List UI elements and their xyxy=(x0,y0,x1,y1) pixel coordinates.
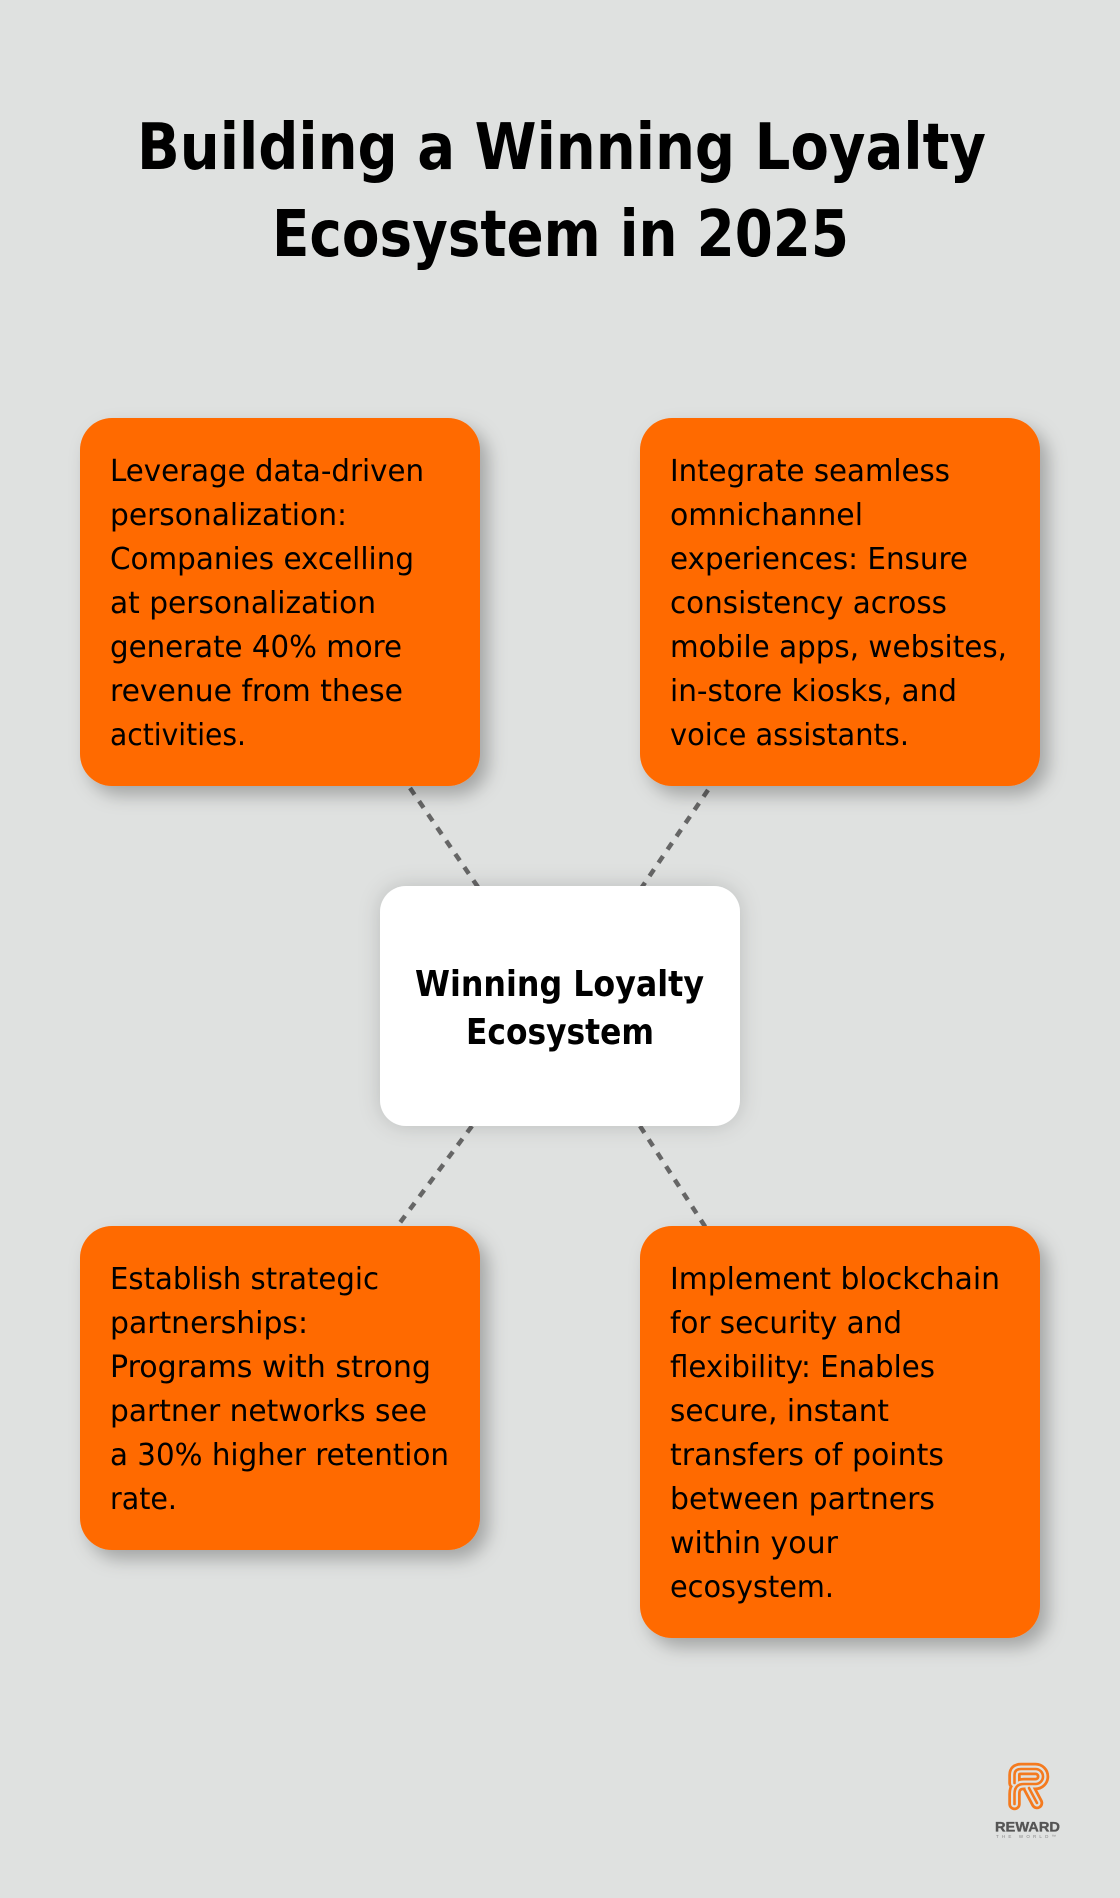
icon: R mark xyxy=(1014,1769,1043,1804)
logo: Reward the World xyxy=(995,1769,1060,1839)
panel: data-driven personalization xyxy=(80,418,480,786)
hub label xyxy=(415,964,704,1053)
connector: partnerships to hub xyxy=(396,1126,472,1228)
text: omnichannel: mobile apps, websites, xyxy=(670,630,1007,665)
panel: central hub xyxy=(380,886,740,1126)
text: partnerships: Establish strategic xyxy=(110,1262,379,1297)
title: Ecosystem in 2025 xyxy=(272,198,849,272)
text: blockchain: Implement blockchain xyxy=(670,1262,1000,1297)
text: personalization: activities. xyxy=(110,718,246,753)
text: blockchain xyxy=(670,1262,1000,1605)
text: personalization: personalization: xyxy=(110,498,347,533)
panel: blockchain xyxy=(640,1226,1040,1638)
text: blockchain: secure, instant xyxy=(670,1394,889,1429)
text: personalization: generate 40% more xyxy=(110,630,402,665)
text: omnichannel: consistency across xyxy=(670,586,947,621)
logo wordmark: REWARD xyxy=(995,1818,1060,1834)
hub label: Ecosystem xyxy=(466,1012,654,1053)
connector: omnichannel to hub xyxy=(640,790,708,890)
text: partnerships: partner networks see xyxy=(110,1394,427,1429)
text: partnerships: rate. xyxy=(110,1482,177,1517)
panel: strategic partnerships xyxy=(80,1226,480,1550)
text: blockchain: between partners xyxy=(670,1482,935,1517)
connector: personalization to hub xyxy=(410,788,480,890)
text: personalization: at personalization xyxy=(110,586,376,621)
text: omnichannel: experiences: Ensure xyxy=(670,542,968,577)
text: blockchain: flexibility: Enables xyxy=(670,1350,935,1385)
connector: blockchain to hub xyxy=(640,1126,706,1228)
text: personalization: Companies excelling xyxy=(110,542,414,577)
text: personalization xyxy=(110,454,424,753)
text: personalization: Leverage data-driven xyxy=(110,454,424,489)
text: blockchain: transfers of points xyxy=(670,1438,944,1473)
text: partnerships: partnerships: xyxy=(110,1306,308,1341)
hub label: Winning Loyalty xyxy=(415,964,704,1005)
text: omnichannel xyxy=(670,454,1007,753)
text: blockchain: within your xyxy=(670,1526,839,1561)
text: blockchain: ecosystem. xyxy=(670,1570,834,1605)
title xyxy=(137,111,986,272)
text: omnichannel: Integrate seamless xyxy=(670,454,950,489)
text: omnichannel: in-store kiosks, and xyxy=(670,674,957,709)
text: personalization: revenue from these xyxy=(110,674,403,709)
text: partnerships: Programs with strong xyxy=(110,1350,431,1385)
title: Building a Winning Loyalty xyxy=(137,111,986,185)
text: omnichannel: voice assistants. xyxy=(670,718,909,753)
text: omnichannel: omnichannel xyxy=(670,498,863,533)
text: partnerships xyxy=(110,1262,449,1517)
text: partnerships: a 30% higher retention xyxy=(110,1438,449,1473)
text: blockchain: for security and xyxy=(670,1306,902,1341)
logo tagline: THE WORLD™ xyxy=(996,1834,1056,1839)
panel: omnichannel experiences xyxy=(640,418,1040,786)
